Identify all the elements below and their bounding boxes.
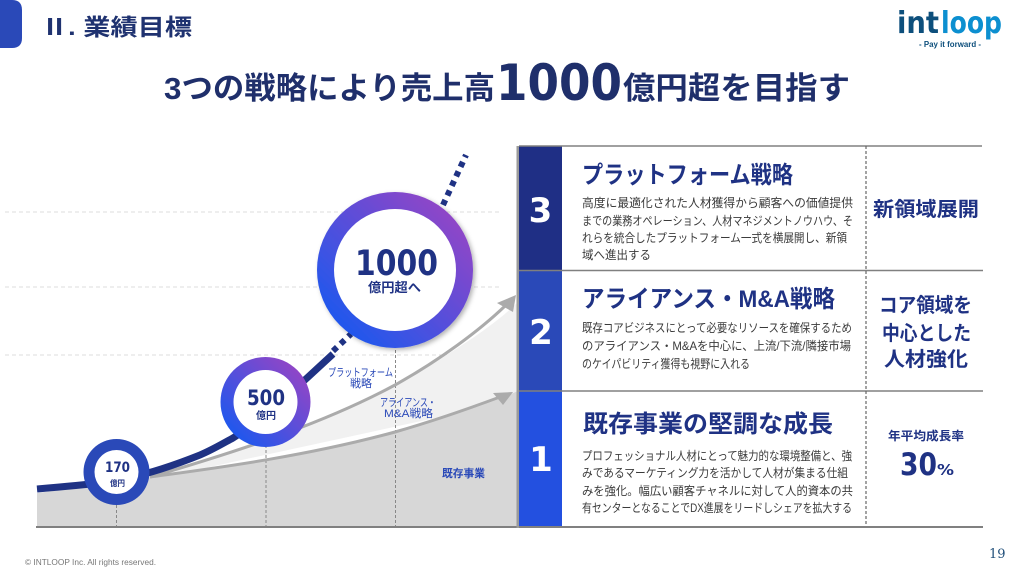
logo: int xyxy=(897,6,939,41)
circle: 500 xyxy=(220,357,310,447)
strategy 3 text: 域へ進出する xyxy=(582,248,651,262)
label: platform xyxy=(328,366,393,390)
strategy 3 text: れらを統合したプラットフォーム一式を横展開し、新領 xyxy=(582,231,847,245)
arrow: lower growth xyxy=(150,392,513,477)
keyword: core domain xyxy=(879,294,972,371)
main title xyxy=(164,54,850,112)
label: alliance: M&A戦略 xyxy=(384,406,433,420)
strategy 1 text xyxy=(582,411,853,515)
keyword: new domain: 新領域展開 xyxy=(873,198,979,221)
strategy 2 text: 既存コアビジネスにとって必要なリソースを確保するため xyxy=(582,320,852,335)
circle: 170 xyxy=(84,439,150,505)
keyword: core domain: コア領域を xyxy=(879,294,972,317)
circle: 1000 xyxy=(317,192,473,348)
circle: 500: 億円 xyxy=(256,409,276,422)
keyword: core domain: 人材強化 xyxy=(884,348,968,371)
strategy 1 text: 有センターとなることでDX進展をリードしシェアを拡大する xyxy=(582,501,852,515)
keyword: core domain: 中心とした xyxy=(882,322,971,345)
keyword: growth rate: % xyxy=(937,461,954,479)
area: existing business xyxy=(37,391,518,527)
label: alliance xyxy=(380,397,436,420)
keyword: growth rate xyxy=(888,428,964,483)
strategy 1 text: みであるマーケティング力を活かして人材が集まる仕組 xyxy=(582,465,848,480)
revenue line xyxy=(37,354,333,489)
number block 3: 3 xyxy=(529,191,552,231)
header tab xyxy=(0,0,22,48)
logo xyxy=(897,6,1002,49)
main title: 3つの戦略により売上高 xyxy=(164,71,495,106)
copyright: © INTLOOP Inc. All rights reserved. xyxy=(25,558,156,567)
label: platform: プラットフォーム xyxy=(328,366,393,379)
strategy 1 text: プロフェッショナル人材にとって魅力的な環境整備と、強 xyxy=(582,448,852,463)
circle: 170: 億円 xyxy=(110,478,125,488)
number block 2: 2 xyxy=(529,313,553,353)
label: platform: 戦略 xyxy=(350,376,372,390)
panel: growth chart xyxy=(5,155,518,527)
strategy 3 text xyxy=(582,162,853,262)
strategy 3 text: 高度に最適化された人材獲得から顧客への価値提供 xyxy=(582,195,853,210)
strategy 2 text: のアライアンス・M&Aを中心に、上流/下流/隣接市場 xyxy=(582,338,851,353)
number block 3 xyxy=(519,146,562,270)
label: alliance: アライアンス・ xyxy=(380,397,436,409)
strategy 1 text: みを強化。幅広い顧客チャネルに対して人的資本の共 xyxy=(582,483,853,498)
arrow: upper growth xyxy=(150,295,516,477)
strategy 1 text: 既存事業の堅調な成長 xyxy=(583,411,833,438)
area: alliance layer xyxy=(150,302,518,480)
number block 1: 1 xyxy=(529,440,553,480)
main title: 1000 xyxy=(496,54,622,112)
logo: - Pay it forward - xyxy=(919,40,981,49)
label: existing business: 既存事業 xyxy=(442,466,485,480)
strategy 2 text: アライアンス・M&A戦略 xyxy=(582,286,835,313)
strategy 2 text xyxy=(582,286,852,371)
strategy 2 text: のケイパビリティ獲得も視野に入れる xyxy=(582,356,750,371)
circle: 1000: 億円超へ xyxy=(368,280,421,296)
main title: 億円超を目指す xyxy=(623,71,850,106)
strategy 3 text: までの業務オペレーション、人材マネジメントノウハウ、そ xyxy=(582,214,853,228)
keyword: growth rate: 30 xyxy=(900,447,937,483)
strategy 3 text: プラットフォーム戦略 xyxy=(582,162,793,189)
logo: loop xyxy=(941,6,1002,41)
circle: 500: 500 xyxy=(247,386,285,410)
panel: strategy table xyxy=(516,146,983,528)
circle: 170: 170 xyxy=(105,460,130,476)
page number: 19 xyxy=(989,547,1006,562)
number block 1 xyxy=(519,391,562,527)
section heading: Ⅱ. 業績目標 xyxy=(41,14,192,40)
number block 2 xyxy=(519,271,562,391)
keyword: growth rate: 年平均成長率 xyxy=(888,428,964,443)
circle: 1000: 1000 xyxy=(355,244,438,284)
